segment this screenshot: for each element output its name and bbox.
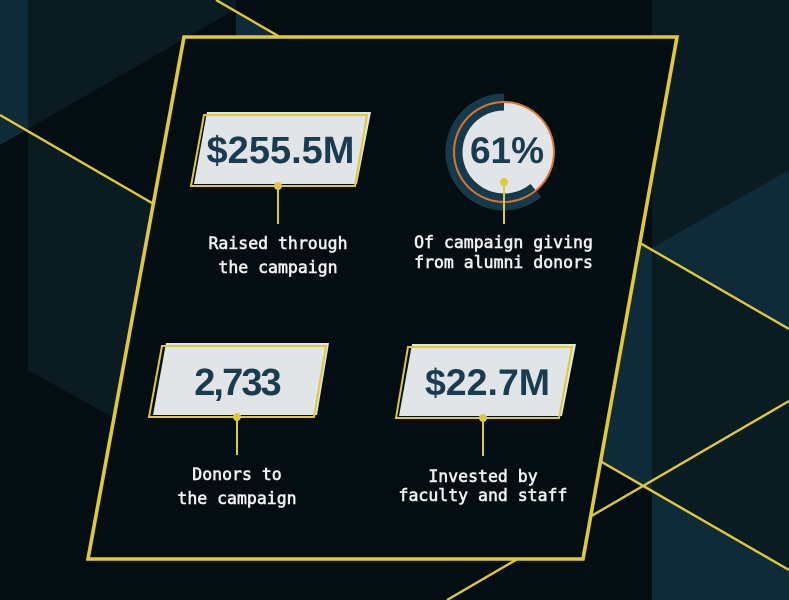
caption: Donors to xyxy=(192,465,282,484)
stat: 2,733 donors xyxy=(149,343,329,508)
donut chart xyxy=(454,102,554,202)
connector xyxy=(233,413,241,455)
stat: $255.5M raised xyxy=(191,112,371,277)
stat: $22.7M invested xyxy=(396,344,576,505)
connector xyxy=(479,414,487,456)
stat: 61% alumni xyxy=(414,102,593,272)
value box: 2,733 xyxy=(194,362,281,404)
caption: from alumni donors xyxy=(414,253,593,272)
value box xyxy=(149,343,329,417)
caption: Invested by xyxy=(428,467,538,486)
caption: the campaign xyxy=(177,489,297,508)
value box xyxy=(191,112,371,186)
caption: Of campaign giving xyxy=(414,233,593,252)
value box: $22.7M xyxy=(425,361,550,403)
value box xyxy=(396,344,576,418)
value box: $255.5M xyxy=(207,130,354,172)
caption: faculty and staff xyxy=(399,486,567,505)
connector xyxy=(274,182,282,224)
connector xyxy=(500,178,508,224)
caption: Raised through xyxy=(208,234,348,253)
caption: the campaign xyxy=(218,258,338,277)
donut chart: 61% xyxy=(470,130,544,171)
panel: main parallelogram xyxy=(88,37,677,559)
